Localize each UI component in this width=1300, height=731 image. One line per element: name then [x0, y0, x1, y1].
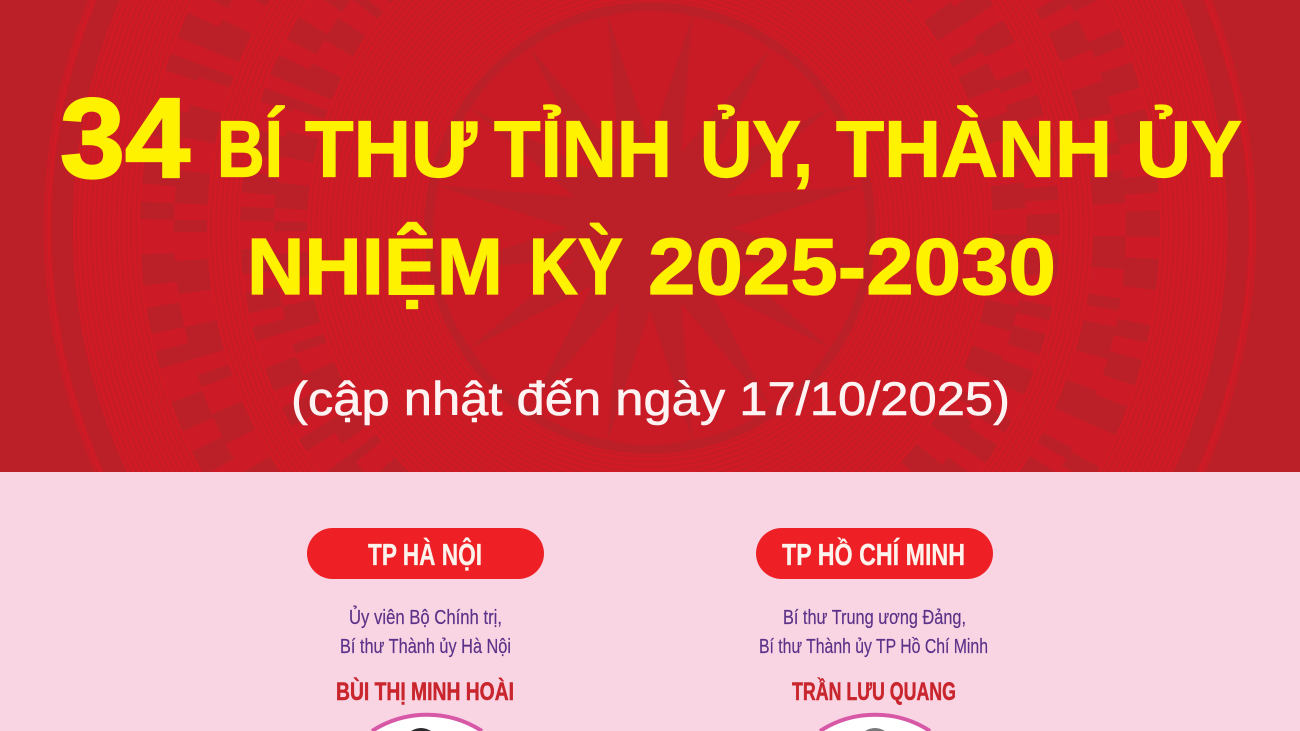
portrait frame [372, 715, 482, 731]
panel: TP Hồ Chí Minh secretary [756, 528, 993, 731]
title: line 1: BÍ [217, 104, 284, 194]
name: BÙI THỊ MINH HOÀI [336, 676, 514, 706]
title: line 1: TỈNH [494, 104, 672, 194]
role text: Ủy viên Bộ Chính trị, [349, 605, 502, 629]
role text [759, 607, 988, 658]
role text: Bí thư Thành ủy TP Hồ Chí Minh [759, 636, 988, 658]
name: TRẦN LƯU QUANG [792, 677, 956, 706]
title: line 2: NHIỆM [247, 222, 503, 311]
label pill: TP Hồ Chí Minh: TP HỒ CHÍ MINH [782, 536, 965, 572]
title: line 1: THƯ [305, 104, 478, 194]
title: line 1: 34 [60, 75, 190, 201]
title: line 2: KỲ [529, 222, 623, 311]
role text [340, 605, 511, 658]
role text: Bí thư Trung ương Đảng, [783, 607, 966, 629]
title: line 2 [247, 222, 1056, 311]
portrait frame [820, 715, 930, 731]
label pill: TP Hồ Chí Minh [756, 528, 993, 579]
label pill: TP Hà Nội [307, 528, 544, 579]
title: line 2: 2025-2030 [648, 222, 1056, 311]
title: line 1 [60, 75, 1242, 201]
subtitle: update date: (cập nhật đến ngày 17/10/2025) [291, 372, 1010, 425]
label pill: TP Hà Nội: TP HÀ NỘI [368, 536, 482, 572]
title: line 1: ỦY [1136, 104, 1242, 194]
panel: Hà Nội secretary [307, 528, 544, 731]
title: line 1: THÀNH [836, 104, 1112, 194]
title: line 1: ỦY, [700, 104, 813, 194]
panel: red header with bronze drum pattern [0, 0, 1300, 472]
role text: Bí thư Thành ủy Hà Nội [340, 636, 511, 658]
drum star [433, 11, 867, 445]
